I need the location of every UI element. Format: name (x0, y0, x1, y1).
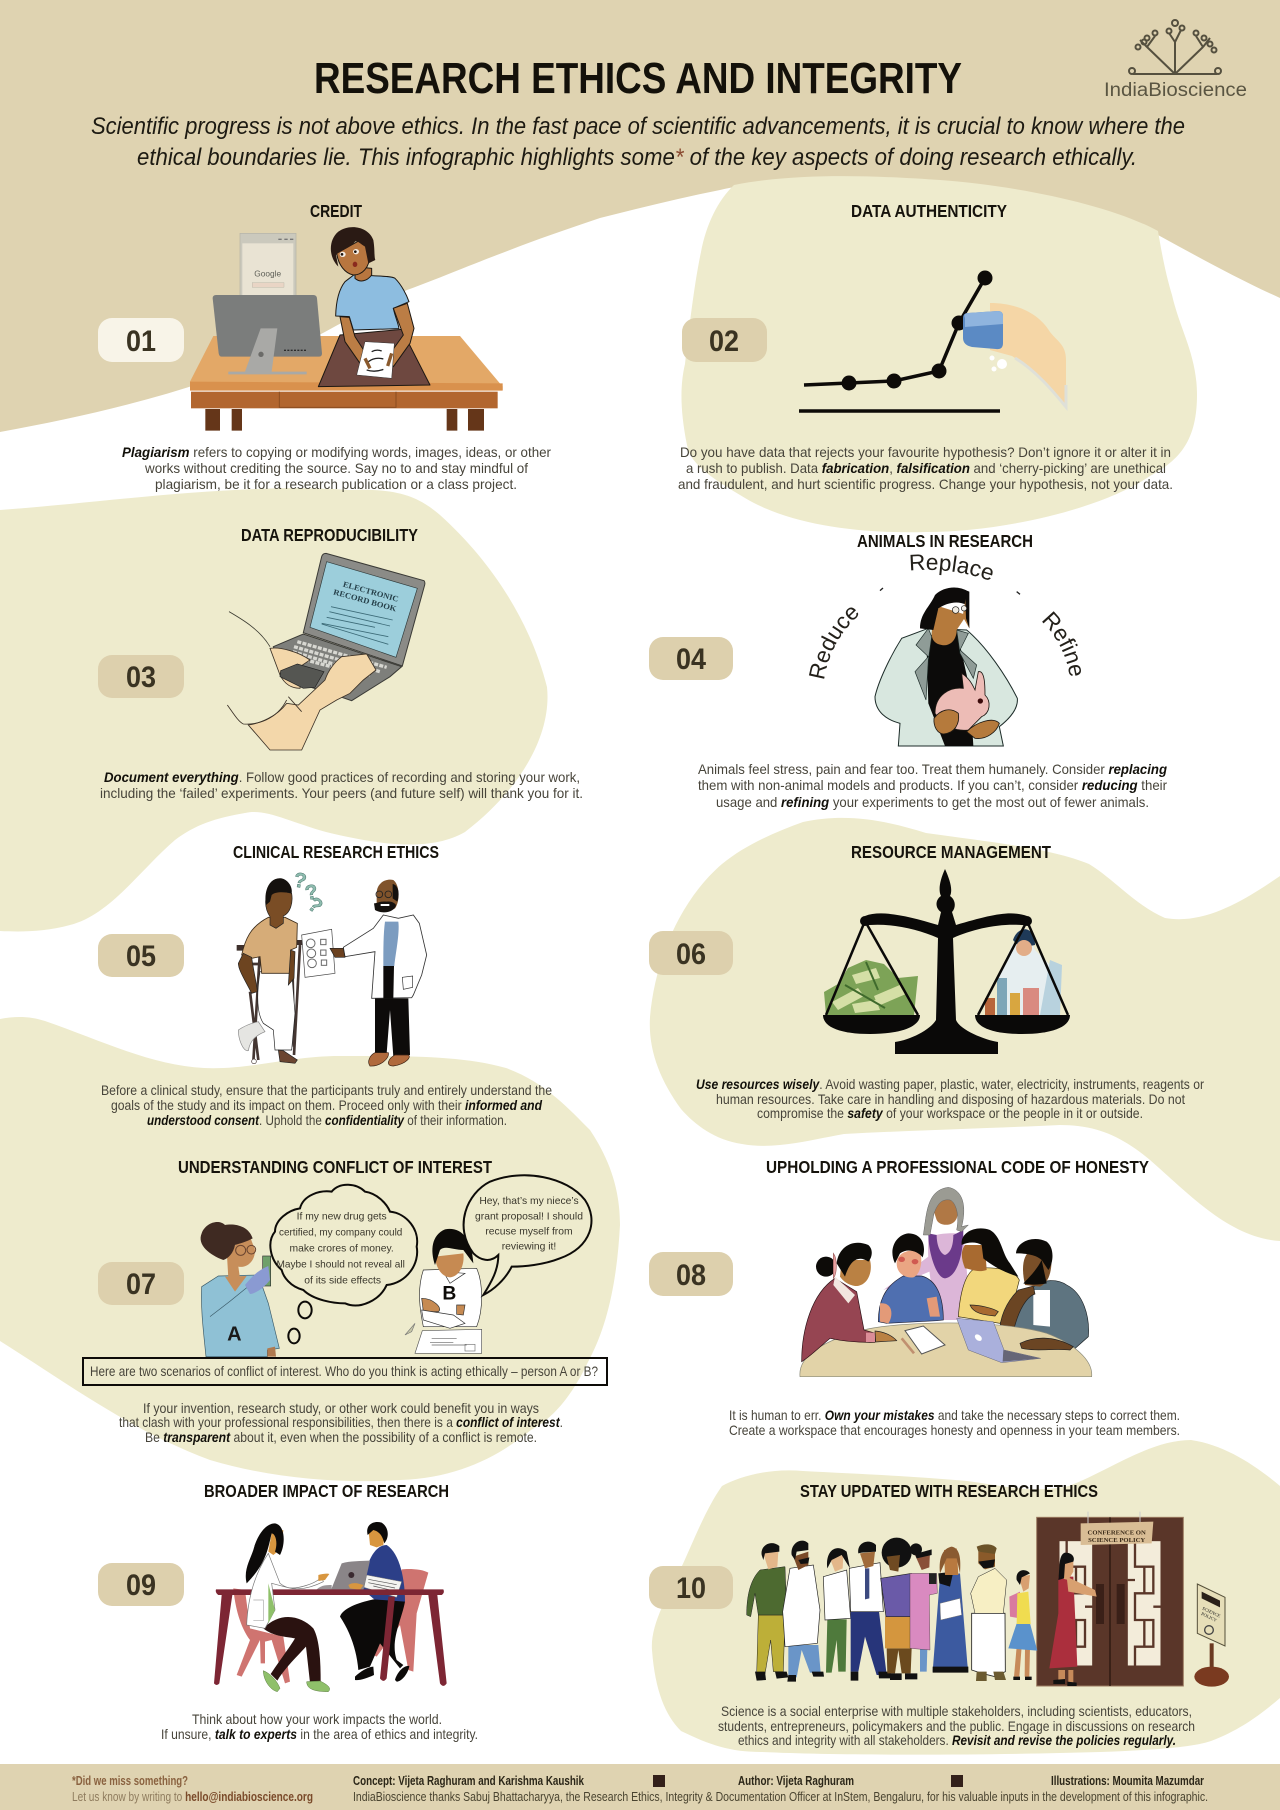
science policy sign (1194, 1584, 1229, 1687)
panel: 08 professional code of honesty (649, 1157, 1180, 1438)
text: document everything: Document everything. Follow good practices of recording and storing your work, (104, 769, 580, 785)
illustration: patient with crutches and doctor: ? (303, 880, 320, 905)
number badge 02 (682, 318, 767, 362)
panel: 01 credit (98, 201, 551, 492)
background: pale blob stay updated (652, 1440, 1280, 1755)
panel: 02 data authenticity (678, 201, 1173, 492)
text: use resources wisely: human resources. Take care in handling and disposing of hazardous materials. Do not (716, 1091, 1185, 1107)
panel: 10 stay updated with research ethics (649, 1481, 1229, 1748)
background: pale blob conflict of interest (0, 1017, 620, 1481)
illustration: team around a table (800, 1187, 1092, 1377)
heading: data reproducibility: DATA REPRODUCIBILITY (241, 525, 418, 545)
subtitle intro: Scientific progress is not above ethics. In the fast pace of scientific advancements, it is crucial to know where the (91, 113, 1185, 140)
illustration: scientist holding rabbit: Replace (910, 554, 993, 580)
science policy sign: POLICY (1200, 1612, 1218, 1624)
number badge 07 (98, 1262, 184, 1305)
illustration: queue of people at conference door (747, 1512, 1229, 1687)
text: plagiarism (122, 444, 551, 492)
thought cloud of A: Maybe I should not reveal all (276, 1260, 405, 1271)
text: own your mistakes: Create a workspace that encourages honesty and openness in your team members. (729, 1422, 1180, 1438)
science policy sign: SCIENCE (1201, 1607, 1221, 1619)
conference door: SCIENCE POLICY (1088, 1537, 1145, 1544)
text: replacing reducing refining: them with non-animal models and products. If you can’t, consider reducing their (698, 777, 1167, 793)
number badge 06: 06 (676, 938, 706, 971)
number badge 03: 03 (126, 661, 156, 694)
illustration: balance scale money vs lab (823, 869, 1070, 1054)
text: informed consent: understood consent. Uphold the confidentiality of their information. (147, 1112, 507, 1128)
text: science is a social enterprise: students, entrepreneurs, policymakers and the public. Engage in discussions on research (718, 1718, 1195, 1734)
thought cloud of A (270, 1185, 417, 1343)
number badge 05: 05 (126, 940, 156, 973)
text: talk to experts: If unsure, talk to experts in the area of ethics and integrity. (161, 1726, 478, 1742)
illustration: hands typing on laptop (227, 553, 425, 750)
number badge 10: 10 (676, 1572, 706, 1605)
background: pale blob data reproducibility (0, 488, 548, 931)
footer: credits (353, 1774, 1208, 1804)
speech bubble of B: Hey, that’s my niece’s (479, 1196, 579, 1207)
text: plagiarism: works without crediting the source. Say no to and stay mindful of (144, 460, 528, 476)
text: plagiarism: plagiarism, be it for a research publication or a class project. (155, 476, 517, 492)
text: conflict of interest explanation: that clash with your professional responsibilities, then there is a conflict of interest. (119, 1414, 563, 1430)
speech bubble of B: recuse myself from (485, 1226, 573, 1237)
number badge 08: 08 (676, 1259, 706, 1292)
number badge 04: 04 (676, 643, 706, 676)
heading: broader impact: BROADER IMPACT OF RESEARCH (204, 1481, 449, 1501)
text: document everything (100, 769, 583, 801)
illustration: hands typing on laptop: ELECTRONIC (342, 580, 400, 604)
conference door (1037, 1512, 1183, 1686)
illustration: patient with crutches and doctor: ? (303, 893, 327, 919)
number badge 08 (649, 1252, 733, 1296)
illustration: patient with crutches and doctor: ? (292, 868, 308, 893)
text: talk to experts: Think about how your work impacts the world. (192, 1711, 442, 1727)
text: replacing reducing refining: Animals feel stress, pain and fear too. Treat them humanely. Consider replacing (698, 761, 1167, 777)
number badge 04 (649, 637, 733, 680)
text: replacing reducing refining (698, 761, 1167, 810)
text: replacing reducing refining: usage and refining your experiments to get the most out of fewer animals. (716, 794, 1149, 810)
panel: 05 clinical research ethics (98, 842, 552, 1128)
text: conflict of interest explanation: Be transparent about it, even when the possibility of a conflict is remote. (145, 1429, 537, 1445)
person at door in red dress (1049, 1553, 1097, 1686)
text: science is a social enterprise (718, 1703, 1195, 1748)
subtitle intro: ethical boundaries lie. This infographic highlights some* of the key aspects of doing research ethically. (137, 144, 1137, 171)
background: pale blob resource management (650, 818, 1280, 1241)
illustration: hands typing on laptop: RECORD BOOK (332, 587, 398, 614)
text: use resources wisely (696, 1076, 1204, 1121)
thought cloud of A: make crores of money. (290, 1244, 394, 1255)
illustration: patient with crutches and doctor (237, 868, 427, 1066)
heading: data authenticity: DATA AUTHENTICITY (851, 201, 1007, 221)
panel: 07 understanding conflict of interest (83, 1157, 607, 1445)
speech bubble of B: reviewing it! (502, 1241, 556, 1252)
number badge 06 (649, 931, 733, 975)
person A: A (227, 1324, 242, 1346)
panel: 04 animals in research (649, 531, 1167, 810)
person B: B (442, 1283, 456, 1304)
text: plagiarism: Plagiarism refers to copying or modifying words, images, ideas, or other (122, 444, 551, 460)
illustration: scientist holding rabbit (809, 554, 1081, 746)
text: talk to experts (161, 1711, 478, 1742)
background: footer band (0, 1764, 1280, 1810)
heading: stay updated: STAY UPDATED WITH RESEARCH ETHICS (800, 1481, 1098, 1501)
text: informed consent: goals of the study and its impact on them. Proceed only with their informed and (111, 1097, 542, 1113)
panel: 03 data reproducibility (98, 525, 583, 801)
number badge 09: 09 (126, 1569, 156, 1602)
heading: code of honesty: UPHOLDING A PROFESSIONAL CODE OF HONESTY (766, 1157, 1149, 1177)
number badge 01: 01 (126, 325, 156, 358)
heading: credit: CREDIT (310, 201, 362, 221)
icon: lab items (985, 929, 1062, 1015)
heading: resource management: RESOURCE MANAGEMENT (851, 842, 1051, 862)
background: top tan swoosh (0, 0, 1280, 432)
illustration: persons A and B with thought bubbles (201, 1175, 591, 1357)
background: pale blob data authenticity (681, 176, 1197, 532)
footer: did we miss something: *Did we miss something? (72, 1774, 188, 1788)
title: RESEARCH ETHICS AND INTEGRITY (314, 54, 962, 103)
people queue (747, 1538, 1037, 1682)
thought cloud of A: of its side effects (304, 1275, 381, 1286)
person A (201, 1222, 279, 1357)
text: document everything: including the ‘failed’ experiments. Your peers (and future self) will thank you for it. (100, 785, 583, 801)
thought cloud of A: If my new drug gets (297, 1211, 387, 1222)
icon: hand with eraser (963, 303, 1066, 407)
text: data fabrication (678, 444, 1173, 492)
icon: money pile (824, 960, 918, 1015)
subtitle intro (91, 113, 1185, 171)
heading: animals in research: ANIMALS IN RESEARCH (857, 531, 1033, 551)
illustration: person at desk with monitor: Google (254, 269, 281, 279)
text: use resources wisely: Use resources wisely. Avoid wasting paper, plastic, water, electricity, instruments, reagents or (696, 1076, 1204, 1092)
footer: did we miss something: Let us know by writing to hello@indiabioscience.org (72, 1790, 313, 1804)
footer: credits: Concept: Vijeta Raghuram and Karishma Kaushik (353, 1774, 584, 1788)
text: science is a social enterprise: Science is a social enterprise with multiple stakeholders, including scientists, educators, (721, 1703, 1192, 1719)
text: informed consent (101, 1082, 552, 1128)
panel: 09 broader impact of research (98, 1481, 478, 1742)
speech bubble of B (464, 1175, 591, 1295)
number badge 07: 07 (126, 1268, 156, 1301)
person B (405, 1229, 482, 1353)
chart: line being erased (799, 270, 1066, 411)
number badge 03 (98, 655, 184, 698)
heading: clinical research ethics: CLINICAL RESEARCH ETHICS (233, 842, 439, 862)
text: conflict of interest explanation: If your invention, research study, or other work could benefit you in ways (143, 1400, 539, 1416)
callout: two scenarios question box (83, 1358, 607, 1385)
number badge 05 (98, 934, 184, 977)
speech bubble of B: grant proposal! I should (475, 1211, 583, 1222)
footer: did we miss something (72, 1774, 313, 1804)
illustration: scientist holding rabbit: Refine (1042, 611, 1081, 676)
text: use resources wisely: compromise the safety of your workspace or the people in it or outside. (757, 1105, 1143, 1121)
text: informed consent: Before a clinical study, ensure that the participants truly and entirely understand the (101, 1082, 552, 1098)
text: data fabrication: and fraudulent, and hurt scientific progress. Change your hypothesis, not your data. (678, 476, 1173, 492)
illustration: scientist holding rabbit: Reduce (809, 608, 858, 679)
footer credits (72, 1774, 1208, 1804)
footer: credits: Author: Vijeta Raghuram (738, 1774, 854, 1788)
number badge 09 (98, 1563, 184, 1606)
number badge 02: 02 (709, 325, 739, 358)
illustration: person at desk with monitor (190, 227, 503, 431)
number badge 01 (98, 318, 184, 362)
footer: credits: Illustrations: Moumita Mazumdar (1051, 1774, 1204, 1788)
text: science is a social enterprise: ethics and integrity with all stakeholders. Revisit and revise the policies regularly. (738, 1732, 1176, 1748)
illustration: two people talking at a table (214, 1522, 447, 1692)
logo: IndiaBioscience (1104, 20, 1247, 101)
text: data fabrication: a rush to publish. Data fabrication, falsification and ‘cherry-picking’ are unethical (686, 460, 1166, 476)
conference door: CONFERENCE ON (1088, 1529, 1146, 1536)
callout: two scenarios question box: Here are two scenarios of conflict of interest. Who do you think is acting ethically – person A or B? (90, 1363, 598, 1379)
number badge 10 (649, 1566, 733, 1609)
text: own your mistakes: It is human to err. Own your mistakes and take the necessary steps to correct them. (729, 1407, 1180, 1423)
text: own your mistakes (729, 1407, 1180, 1438)
thought cloud of A: certified, my company could (279, 1228, 403, 1239)
heading: conflict of interest: UNDERSTANDING CONFLICT OF INTEREST (178, 1157, 492, 1177)
text: conflict of interest explanation (119, 1400, 563, 1445)
text: data fabrication: Do you have data that rejects your favourite hypothesis? Don’t ignore it or alter it in (680, 444, 1171, 460)
logo: IndiaBioscience: IndiaBioscience (1104, 80, 1247, 101)
panel: 06 resource management (649, 842, 1204, 1121)
